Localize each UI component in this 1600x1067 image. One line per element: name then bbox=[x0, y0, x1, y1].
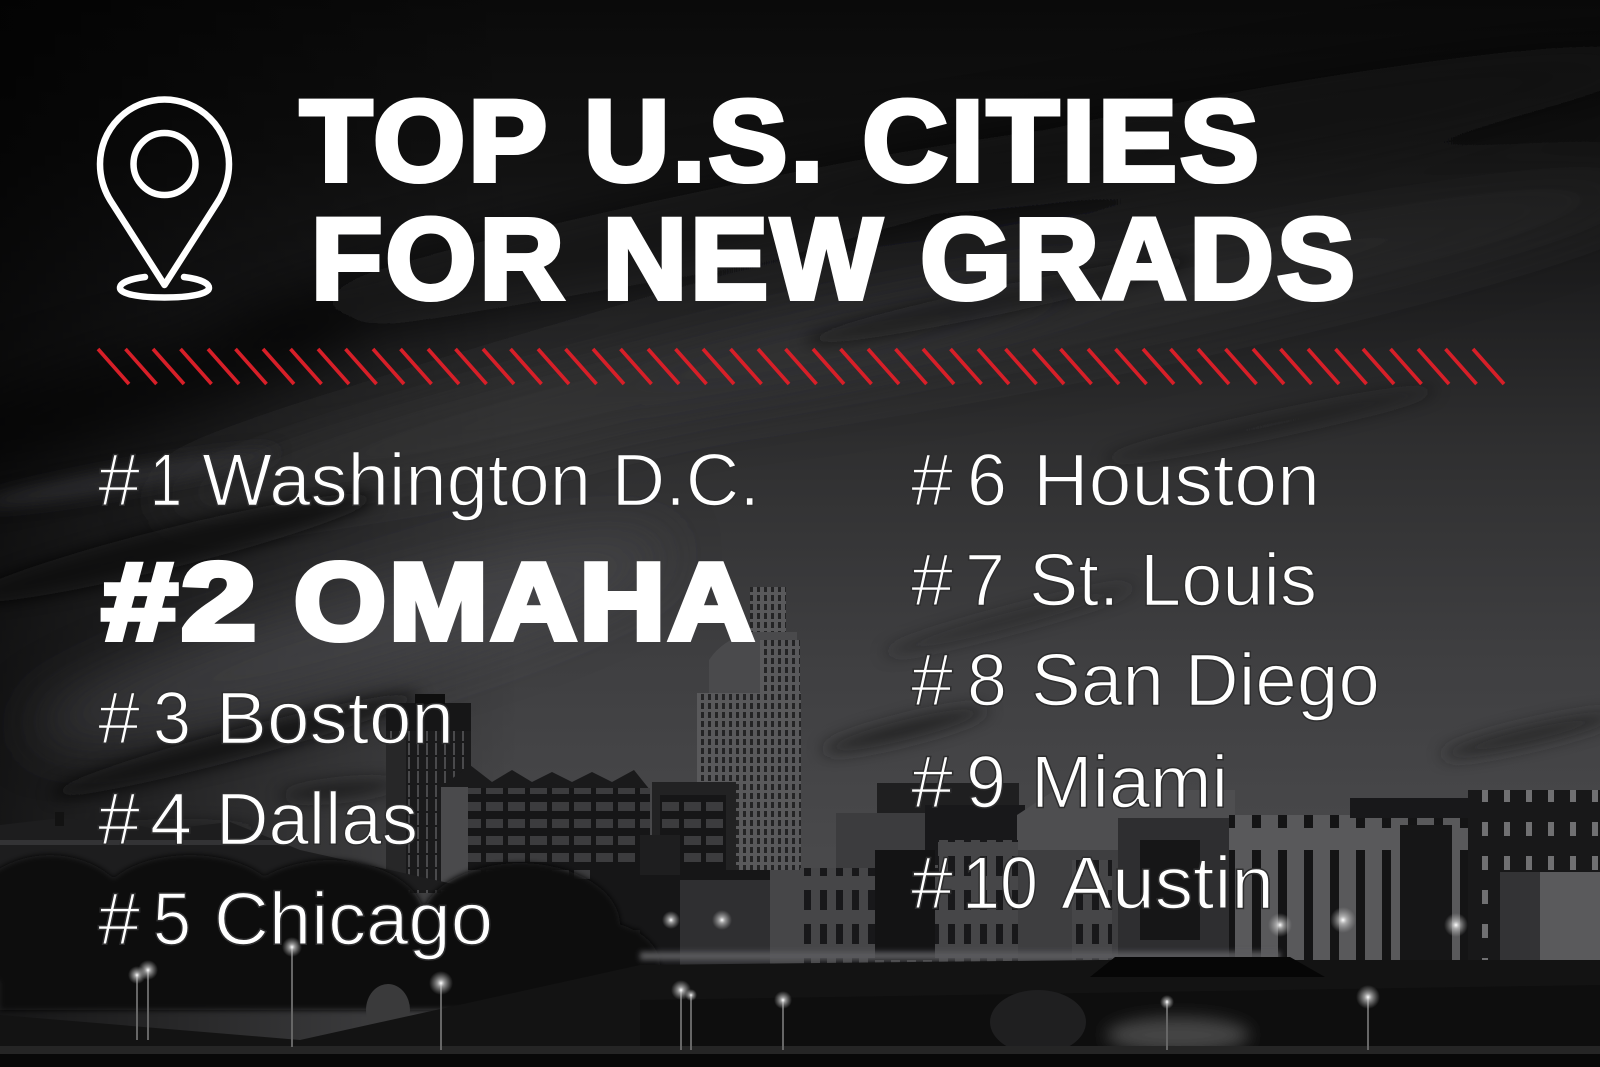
rank 6 bbox=[911, 438, 1320, 522]
rank 2 highlighted: OMAHA bbox=[294, 541, 757, 663]
ranking list: left column bbox=[98, 438, 760, 960]
gabled glass building bbox=[441, 765, 650, 920]
tall tower bbox=[697, 587, 801, 893]
rank 2 highlighted: #2 bbox=[102, 541, 260, 663]
rank 9 bbox=[911, 740, 1228, 824]
rank 1: 1 bbox=[150, 438, 182, 522]
rank 10: 10 bbox=[962, 842, 1038, 924]
title: TOP U.S. CITIES bbox=[300, 78, 1262, 206]
rank 5 bbox=[98, 878, 493, 960]
stepped building beside the tower bbox=[590, 782, 810, 970]
rank 6: Houston bbox=[1033, 438, 1320, 522]
rank 3: Boston bbox=[216, 676, 454, 760]
rank 8: 8 bbox=[967, 638, 1007, 722]
rank 3: 3 bbox=[153, 676, 191, 760]
tree line bbox=[0, 855, 660, 1010]
rank 4 bbox=[98, 778, 418, 860]
icon: map location pin bbox=[100, 100, 229, 298]
rank 4: 4 bbox=[150, 778, 192, 860]
divider: red hatch line bbox=[98, 349, 1504, 384]
lit grass bbox=[1106, 1017, 1250, 1053]
rank 5: Chicago bbox=[214, 878, 493, 960]
rank 7: St. Louis bbox=[1029, 538, 1317, 622]
rank 8: # bbox=[911, 638, 953, 722]
shoreline lights bbox=[640, 952, 1280, 960]
illuminated tree bbox=[366, 984, 410, 1036]
rank 9: Miami bbox=[1031, 740, 1228, 824]
rank 3: # bbox=[98, 676, 140, 760]
rank 10: # bbox=[911, 842, 953, 924]
background: Omaha skyline bbox=[0, 587, 1600, 1067]
street lamps bbox=[128, 907, 1468, 1050]
rank 10 bbox=[911, 842, 1274, 924]
rank 5: 5 bbox=[153, 878, 191, 960]
low-roofed hall on the left bbox=[0, 812, 480, 890]
title bbox=[300, 78, 1358, 324]
ranking list: right column bbox=[911, 438, 1380, 924]
title: FOR NEW GRADS bbox=[311, 196, 1358, 324]
hill shadow bbox=[640, 985, 1600, 1050]
rank 8: San Diego bbox=[1031, 638, 1380, 722]
dark office tower bbox=[386, 694, 471, 893]
round bush bbox=[990, 990, 1086, 1054]
rank 5: # bbox=[98, 878, 140, 960]
rank 3 bbox=[98, 676, 454, 760]
rank 6: 6 bbox=[967, 438, 1007, 522]
rank 9: 9 bbox=[966, 740, 1006, 824]
rank 6: # bbox=[911, 438, 953, 522]
rank 1: # bbox=[98, 438, 140, 522]
rank 7: 7 bbox=[965, 538, 1005, 622]
rank 4: Dallas bbox=[216, 778, 418, 860]
rank 7: # bbox=[911, 538, 953, 622]
riverside apartment blocks bbox=[800, 783, 1600, 968]
grass embankment bbox=[0, 960, 1600, 1067]
rank 9: # bbox=[911, 740, 953, 824]
rank 1: Washington D.C. bbox=[202, 438, 760, 522]
rank 10: Austin bbox=[1061, 842, 1274, 924]
rank 4: # bbox=[98, 778, 140, 860]
dark mound bbox=[1090, 957, 1325, 977]
waterfront bbox=[0, 1054, 1600, 1067]
rank 2 highlighted bbox=[102, 541, 757, 663]
